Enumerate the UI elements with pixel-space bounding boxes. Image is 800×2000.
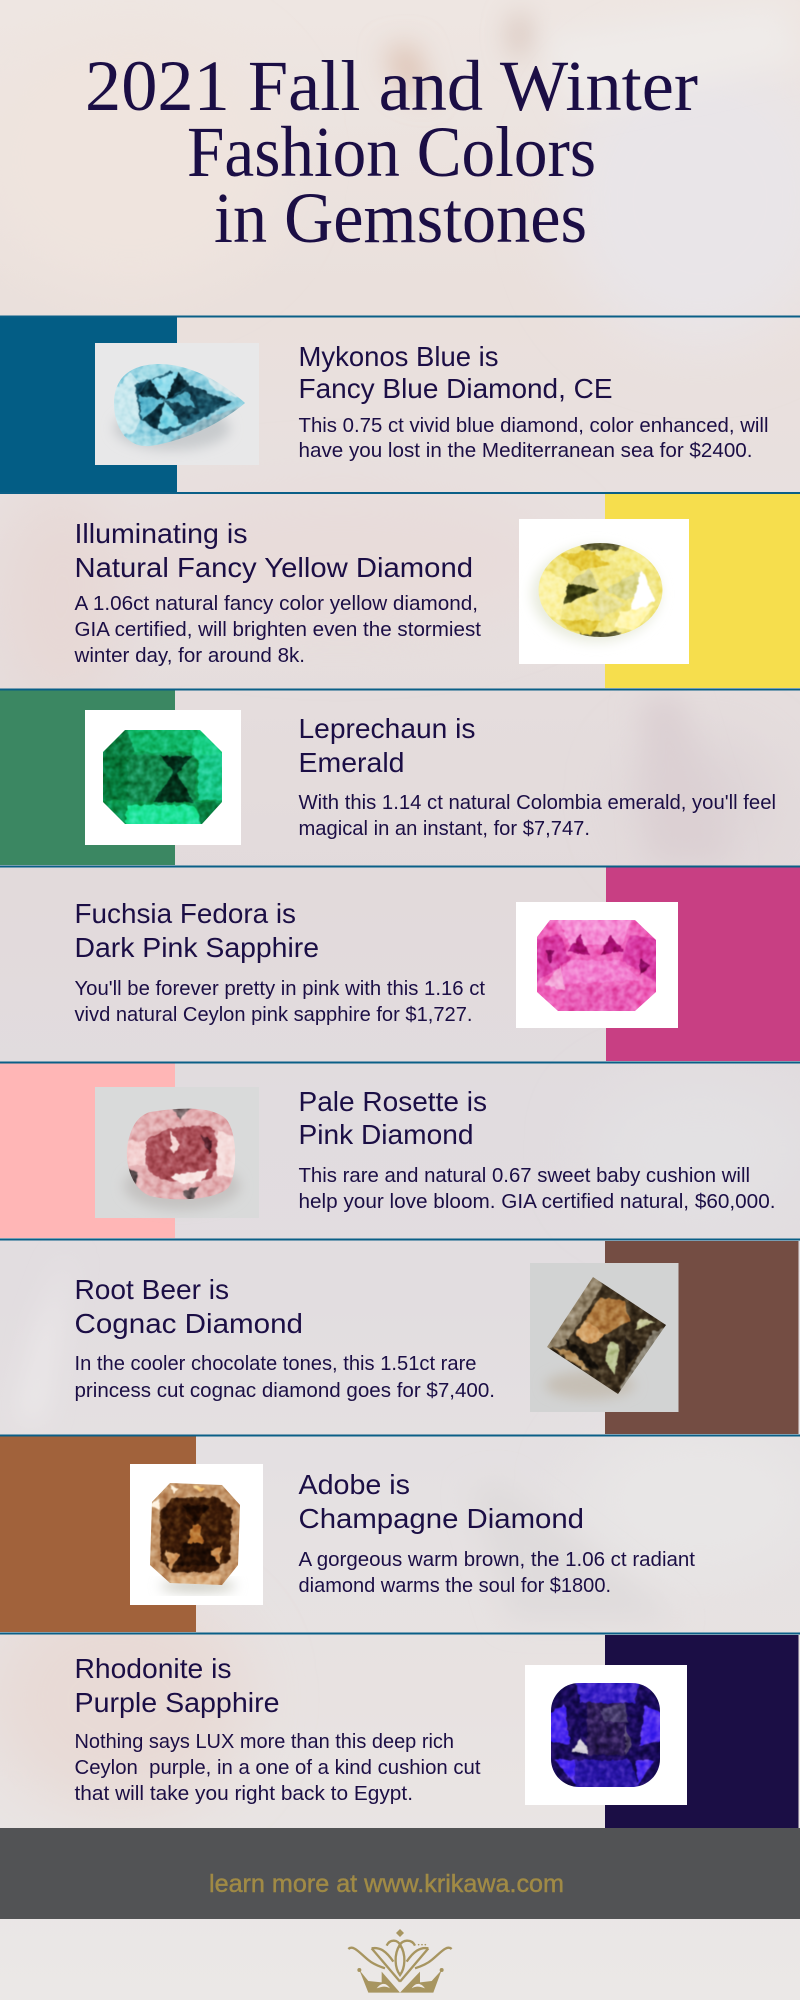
description: Pale Rosette — [298, 1164, 776, 1213]
heading: Fuchsia Fedora: Dark Pink Sapphire — [74, 932, 319, 963]
description: Mykonos Blue — [298, 414, 768, 462]
heading: Adobe: Adobe is — [298, 1469, 410, 1500]
color swatch: Root Beer — [605, 1241, 798, 1434]
color swatch: Adobe — [0, 1436, 196, 1632]
description: Mykonos Blue: have you lost in the Mediterranean sea for $2400. — [298, 439, 752, 462]
color swatch: Rhodonite — [605, 1635, 798, 1828]
description: Illuminating: A 1.06ct natural fancy color yellow diamond, — [74, 592, 478, 615]
gem photo: purple sapphire — [525, 1665, 687, 1805]
description: Adobe — [298, 1548, 695, 1597]
heading: Mykonos Blue — [298, 341, 612, 404]
description: Root Beer — [74, 1352, 495, 1402]
description: Illuminating — [73, 592, 481, 667]
heading: Illuminating: Natural Fancy Yellow Diamond — [74, 552, 473, 583]
description: Pale Rosette: This rare and natural 0.67 sweet baby cushion will — [298, 1164, 750, 1187]
title: Fashion Colors — [187, 112, 596, 192]
heading: Root Beer — [74, 1274, 303, 1339]
description: Leprechaun: With this 1.14 ct natural Colombia emerald, you'll feel — [298, 791, 776, 814]
heading: Adobe — [298, 1469, 584, 1534]
gem photo: champagne diamond — [130, 1464, 263, 1605]
heading: Root Beer: Cognac Diamond — [74, 1308, 303, 1339]
gem photo: pink sapphire — [516, 902, 678, 1028]
panel: Pale Rosette — [0, 1063, 776, 1238]
heading: Illuminating: Illuminating is — [74, 518, 248, 549]
heading: Rhodonite: Rhodonite is — [74, 1653, 232, 1684]
heading: Rhodonite — [74, 1653, 280, 1718]
description: Illuminating: winter day, for around 8k. — [73, 644, 305, 667]
heading: Adobe: Champagne Diamond — [298, 1503, 584, 1534]
heading: Illuminating — [74, 518, 473, 583]
panel: Root Beer — [74, 1241, 798, 1434]
gem photo: cognac diamond — [530, 1263, 678, 1412]
description: Rhodonite: Nothing says LUX more than this deep rich — [74, 1730, 454, 1753]
gem photo: emerald — [85, 710, 241, 845]
heading: Leprechaun: Emerald — [298, 747, 404, 778]
gem photo: blue diamond — [95, 343, 259, 465]
heading: Pale Rosette: Pink Diamond — [298, 1119, 474, 1150]
divider lines between panels — [0, 316, 800, 1634]
heading: Root Beer: Root Beer is — [74, 1274, 229, 1305]
panel: Fuchsia Fedora — [74, 867, 800, 1061]
heading: Leprechaun — [298, 713, 476, 778]
color swatch: Pale Rosette — [0, 1063, 175, 1238]
icon: crown logo — [348, 1929, 452, 1993]
heading: Fuchsia Fedora: Fuchsia Fedora is — [74, 898, 296, 929]
gem photo: pink diamond — [95, 1087, 259, 1218]
description: Root Beer: In the cooler chocolate tones, this 1.51ct rare — [74, 1352, 476, 1375]
panel: Rhodonite — [74, 1635, 798, 1828]
panel: Mykonos Blue — [0, 317, 768, 493]
color swatch: Mykonos Blue — [0, 317, 177, 493]
panel: Illuminating — [73, 494, 800, 688]
title: in Gemstones — [214, 178, 587, 258]
description: Fuchsia Fedora — [74, 977, 485, 1026]
description: Rhodonite: that will take you right back to Egypt. — [74, 1782, 413, 1805]
description: Rhodonite: Ceylon purple, in a one of a kind cushion cut — [74, 1756, 481, 1779]
footer banner — [0, 1828, 800, 1919]
description: Fuchsia Fedora: vivd natural Ceylon pink sapphire for $1,727. — [74, 1003, 472, 1026]
description: Adobe: A gorgeous warm brown, the 1.06 ct radiant — [298, 1548, 695, 1571]
panel: Adobe — [0, 1436, 695, 1632]
heading: Pale Rosette: Pale Rosette is — [298, 1086, 487, 1117]
color swatch: Fuchsia Fedora — [606, 867, 800, 1061]
title: 2021 Fall and Winter — [85, 46, 698, 126]
description: Leprechaun: magical in an instant, for $7,747. — [298, 817, 590, 840]
heading: Mykonos Blue: Mykonos Blue is — [298, 341, 498, 372]
color swatch: Leprechaun — [0, 690, 175, 865]
panel: Leprechaun — [0, 690, 776, 865]
heading: Pale Rosette — [298, 1086, 487, 1150]
heading: Rhodonite: Purple Sapphire — [74, 1687, 280, 1718]
description: Mykonos Blue: This 0.75 ct vivid blue diamond, color enhanced, will — [298, 414, 768, 437]
heading: Mykonos Blue: Fancy Blue Diamond, CE — [298, 373, 612, 404]
heading: Fuchsia Fedora — [74, 898, 319, 963]
description: Root Beer: princess cut cognac diamond goes for $7,400. — [74, 1379, 495, 1402]
footer banner: learn more at www.krikawa.com — [209, 1870, 564, 1898]
description: Leprechaun — [298, 791, 776, 840]
description: Illuminating: GIA certified, will brighten even the stormiest — [74, 618, 481, 641]
gem photo: yellow diamond — [519, 519, 689, 664]
description: Fuchsia Fedora: You'll be forever pretty in pink with this 1.16 ct — [74, 977, 485, 1000]
description: Rhodonite — [74, 1730, 481, 1805]
description: Adobe: diamond warms the soul for $1800. — [298, 1574, 611, 1597]
description: Pale Rosette: help your love bloom. GIA certified natural, $60,000. — [298, 1190, 776, 1213]
title — [85, 46, 698, 258]
color swatch: Illuminating — [605, 494, 800, 688]
heading: Leprechaun: Leprechaun is — [298, 713, 476, 744]
